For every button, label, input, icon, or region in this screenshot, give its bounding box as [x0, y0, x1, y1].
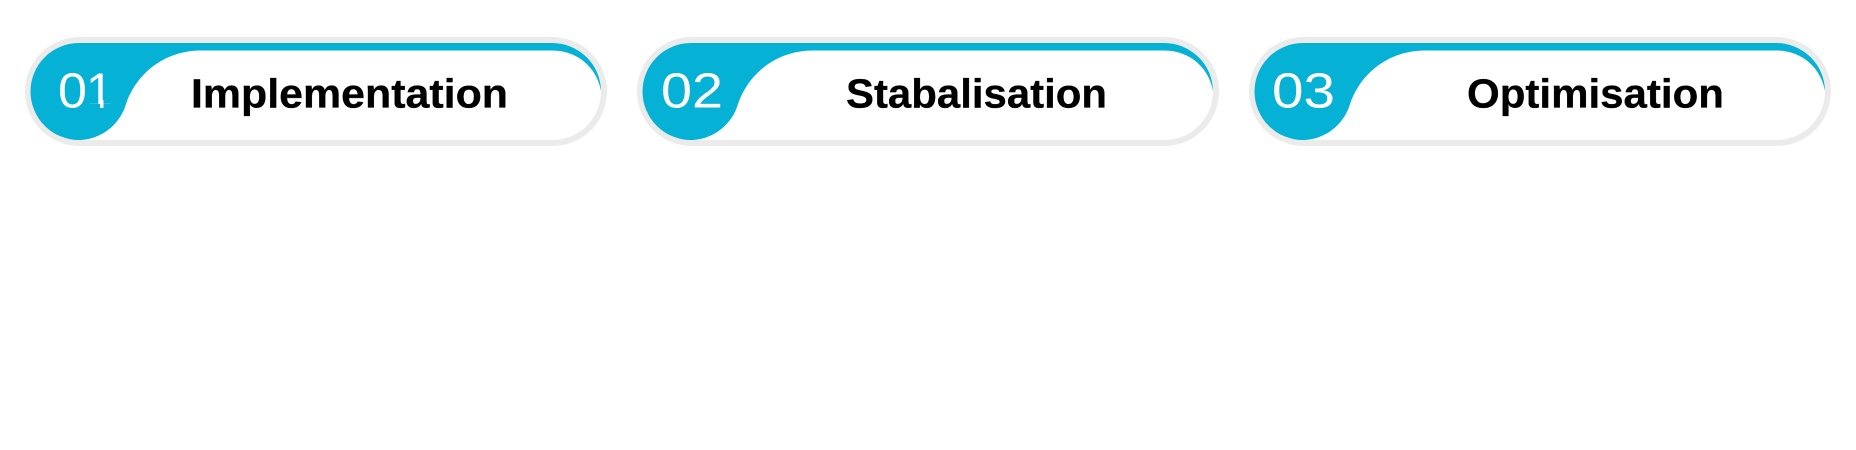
- heading: Stabalisation: [846, 70, 1107, 116]
- step 2: Stabalisation: [640, 40, 1216, 143]
- teal number badge and top band: [642, 43, 1213, 140]
- number 03: 03: [1272, 64, 1335, 118]
- pill outline: [28, 40, 604, 143]
- heading: Optimisation: [1467, 70, 1724, 116]
- number 01: 1: [86, 64, 113, 118]
- step 3: Optimisation: [1252, 40, 1828, 143]
- number 02: 02: [661, 64, 723, 118]
- heading: Implementation: [191, 70, 508, 116]
- teal number badge and top band: [1254, 43, 1825, 140]
- teal number badge and top band: [30, 43, 601, 140]
- number 01: 0: [58, 64, 87, 118]
- step 1: Implementation: [28, 40, 604, 143]
- pill outline: [640, 40, 1216, 143]
- number 01: [60, 73, 111, 108]
- pill outline: [1252, 40, 1828, 143]
